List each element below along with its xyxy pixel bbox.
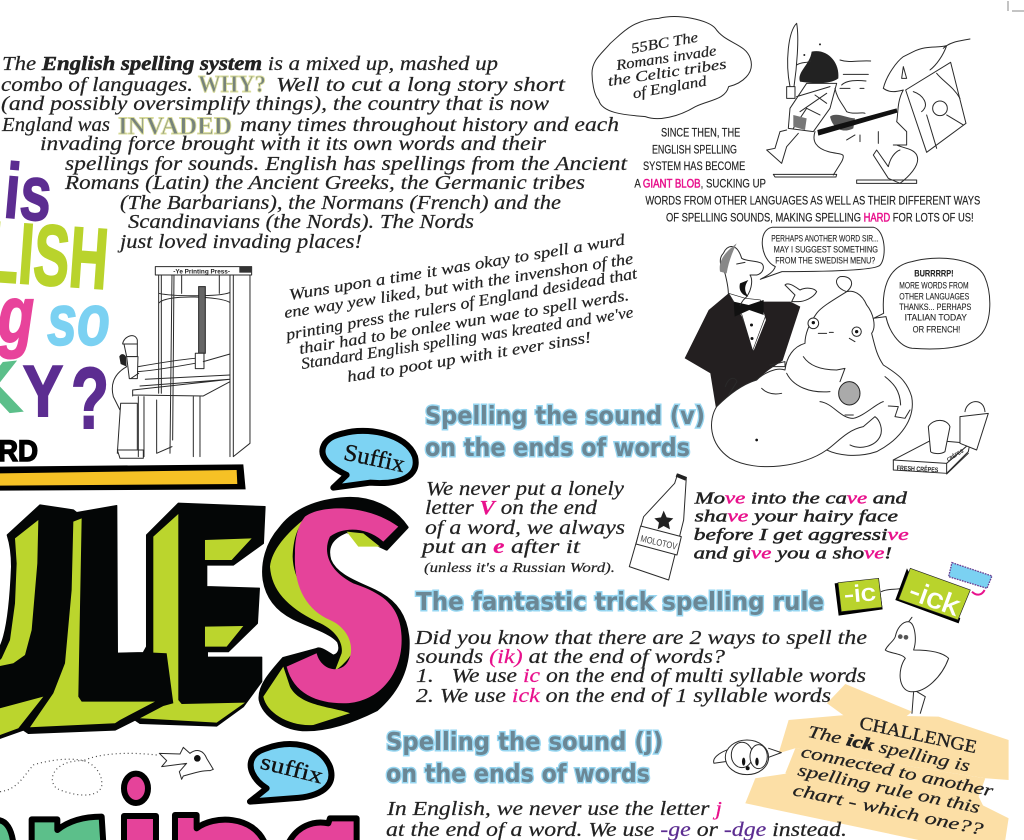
intro text block: Romans (Latin) the Ancient Greeks, the Germanic tribes bbox=[64, 173, 585, 194]
text: giant blob explanation: OF SPELLING SOUNDS, MAKING SPELLING HARD FOR LOTS OF US! bbox=[666, 210, 974, 224]
speech bubble: blob: OTHER LANGUAGES bbox=[899, 291, 969, 301]
text block: ic and ick rule: Did you know that there are 2 ways to spell the bbox=[414, 628, 867, 649]
heading: spelling the sound v: Spelling the sound (v) bbox=[425, 401, 705, 430]
cloud bubble: 55BC: the Celtic tribes bbox=[607, 56, 728, 90]
intro text block: just loved invading places! bbox=[117, 232, 362, 253]
intro text block: Scandinavians (the Nords). The Nords bbox=[128, 212, 474, 233]
icon: chips and coffee box: FRESH CRÊPES bbox=[897, 463, 939, 474]
text: giant blob explanation: SYSTEM HAS BECOME bbox=[643, 159, 745, 173]
callout: printing press story bbox=[283, 231, 639, 386]
callout: challenge: The ick spelling is bbox=[806, 722, 972, 776]
heading: spelling the sound v bbox=[425, 401, 705, 462]
callout: printing press story: Wuns upon a time it was okay to spell a wurd bbox=[288, 231, 627, 304]
text block: ic and ick rule: sounds (ik) at the end of words? bbox=[416, 647, 725, 668]
icon: molotov bottle bbox=[629, 473, 687, 580]
icon: printing press and printer bbox=[112, 267, 252, 458]
callout: printing press story: had to poot up with it ever sinss! bbox=[346, 329, 592, 386]
text block: v sentence: Move into the ca ve and bbox=[693, 488, 907, 507]
title fragment: is English spelling so tricky: ? bbox=[71, 351, 109, 447]
icon: owl peeking bbox=[714, 740, 781, 775]
speech bubble: waiter: FROM THE SWEDISH MENU? bbox=[775, 255, 875, 265]
intro text block: England was bbox=[1, 115, 110, 136]
text block: ic and ick rule: 2. We use ick on the end of 1 syllable words bbox=[416, 686, 831, 707]
title fragment: is English spelling so tricky bbox=[0, 146, 111, 468]
text block: lonely v rule: of a word, we always bbox=[425, 518, 625, 539]
text: giant blob explanation: A GIANT BLOB, SUCKING UP bbox=[634, 176, 766, 190]
text block: v sentence: before I get aggressi ve bbox=[694, 525, 909, 544]
callout: printing press story: Standard English spelling was kreated and we've bbox=[300, 304, 635, 373]
intro text block: (and possibly oversimplify things), the country that is now bbox=[1, 94, 549, 115]
icon: duck bbox=[885, 617, 949, 713]
callout: printing press story: thair had to be onlee wun wae to spell werds. bbox=[298, 287, 630, 358]
heading: trick spelling rule: The fantastic trick spelling rule bbox=[416, 587, 824, 616]
icon: waiter in tuxedo bbox=[685, 243, 817, 408]
text: giant blob explanation: SINCE THEN, THE bbox=[661, 126, 740, 140]
intro text block: (The Barbarians), the Normans (French) and the bbox=[120, 193, 561, 214]
heading: spelling the sound v: on the ends of words bbox=[425, 433, 690, 462]
icon: molotov bottle: MOLOTOV bbox=[640, 534, 679, 552]
speech bubble: blob bbox=[874, 258, 990, 349]
callout: challenge: spelling rule on this bbox=[796, 760, 982, 817]
text block: j rule bbox=[386, 799, 847, 840]
icon: -ic and -ick blocks: -ick bbox=[905, 575, 965, 622]
callout: challenge bbox=[791, 713, 995, 839]
intro text block: The English spelling system is a mixed up, mashed up bbox=[2, 54, 498, 75]
cloud bubble: 55BC: of England bbox=[632, 73, 709, 102]
callout: challenge: connected to another bbox=[799, 742, 995, 801]
icon: Celt and Roman soldier fight bbox=[767, 23, 970, 183]
heading: spelling the sound j bbox=[386, 727, 663, 788]
intro text block: INVADED bbox=[118, 113, 232, 140]
icon: printing press and printer: -Ye Printing Press- bbox=[173, 269, 230, 275]
heading: spelling the sound j: Spelling the sound (j) bbox=[386, 727, 663, 756]
speech bubble: blob: THANKS... PERHAPS bbox=[899, 302, 971, 312]
text block: v sentence: and gi ve you a sho ve! bbox=[694, 543, 892, 562]
text: giant blob explanation bbox=[634, 126, 980, 224]
speech bubble: suffix: Suffix bbox=[341, 440, 407, 478]
intro text block: many times throughout history and each bbox=[240, 115, 619, 136]
text block: v sentence bbox=[693, 488, 909, 562]
text: giant blob explanation: ENGLISH SPELLING bbox=[652, 142, 737, 156]
callout: challenge: CHALLENGE bbox=[858, 713, 979, 757]
icon: chips and coffee box bbox=[893, 402, 988, 474]
speech bubble: waiter: MAY I SUGGEST SOMETHING bbox=[774, 245, 878, 255]
speech bubble: blob: MORE WORDS FROM bbox=[899, 280, 969, 290]
intro text block: invading force brought with it its own words and their bbox=[40, 134, 546, 155]
speech bubble: suffix bbox=[322, 431, 416, 488]
speech bubble: blob: OR FRENCH! bbox=[913, 325, 960, 335]
big title: RULES bbox=[0, 498, 408, 738]
intro text block: Well to cut a long story short bbox=[276, 75, 566, 96]
text block: lonely v rule: letter V on the end bbox=[425, 498, 597, 519]
text block: ic and ick rule: 1. We use ic on the end of multi syllable words bbox=[416, 666, 866, 687]
speech bubble: blob: ITALIAN TODAY bbox=[905, 313, 967, 323]
speech bubble: blob: BURRRRP! bbox=[914, 269, 954, 279]
callout: challenge: chart - which one?? bbox=[791, 780, 985, 839]
callout: printing press story: printing press the rulers of England desidead that bbox=[284, 265, 639, 344]
intro text block: spellings for sounds. English has spellings from the Ancient bbox=[65, 154, 628, 175]
speech bubble: suffix lower: suffix bbox=[258, 749, 326, 789]
icon: giant blob character bbox=[712, 276, 912, 467]
icon: chips and coffee box: CRÊPES bbox=[945, 447, 965, 463]
callout: printing press story: ene way yew liked, but with the invenshon of the bbox=[283, 251, 634, 322]
text block: lonely v rule bbox=[419, 479, 625, 576]
text block: lonely v rule: We never put a lonely bbox=[426, 479, 624, 500]
speech bubble: waiter: PERHAPS ANOTHER WORD SIR... bbox=[771, 233, 879, 243]
intro text block: combo of languages. bbox=[1, 75, 193, 96]
text block: lonely v rule: put an e after it bbox=[419, 537, 581, 558]
cloud bubble: 55BC: Romans invade bbox=[614, 43, 718, 74]
heading: spelling the sound j: on the ends of words bbox=[386, 759, 650, 788]
speech bubble: waiter bbox=[760, 227, 884, 279]
cloud bubble: 55BC bbox=[592, 17, 751, 119]
highlight: challenge background bbox=[745, 684, 1009, 840]
icon: -ic and -ick blocks bbox=[835, 563, 992, 623]
speech bubble: suffix lower bbox=[250, 744, 331, 802]
cloud bubble: 55BC: 55BC The bbox=[630, 30, 700, 57]
bottom title fragment: outlined letters bbox=[0, 774, 357, 840]
intro text block bbox=[1, 54, 628, 253]
icon: bird with dotted flight path bbox=[0, 747, 213, 795]
title fragment: is English spelling so tricky: so bbox=[47, 281, 110, 361]
text block: lonely v rule: (unless it's a Russian Word). bbox=[424, 561, 615, 576]
icon: -ic and -ick blocks: -ic bbox=[843, 579, 877, 608]
title fragment: is English spelling so tricky: is bbox=[1, 146, 56, 238]
text block: j rule: In English, we never use the letter j bbox=[386, 799, 722, 820]
text block: ic and ick rule bbox=[414, 628, 867, 707]
text block: v sentence: shave your hairy face bbox=[695, 507, 898, 526]
title fragment: is English spelling so tricky: Y bbox=[23, 352, 63, 432]
yellow bar bbox=[0, 464, 246, 491]
intro text block: WHY? bbox=[198, 72, 266, 98]
